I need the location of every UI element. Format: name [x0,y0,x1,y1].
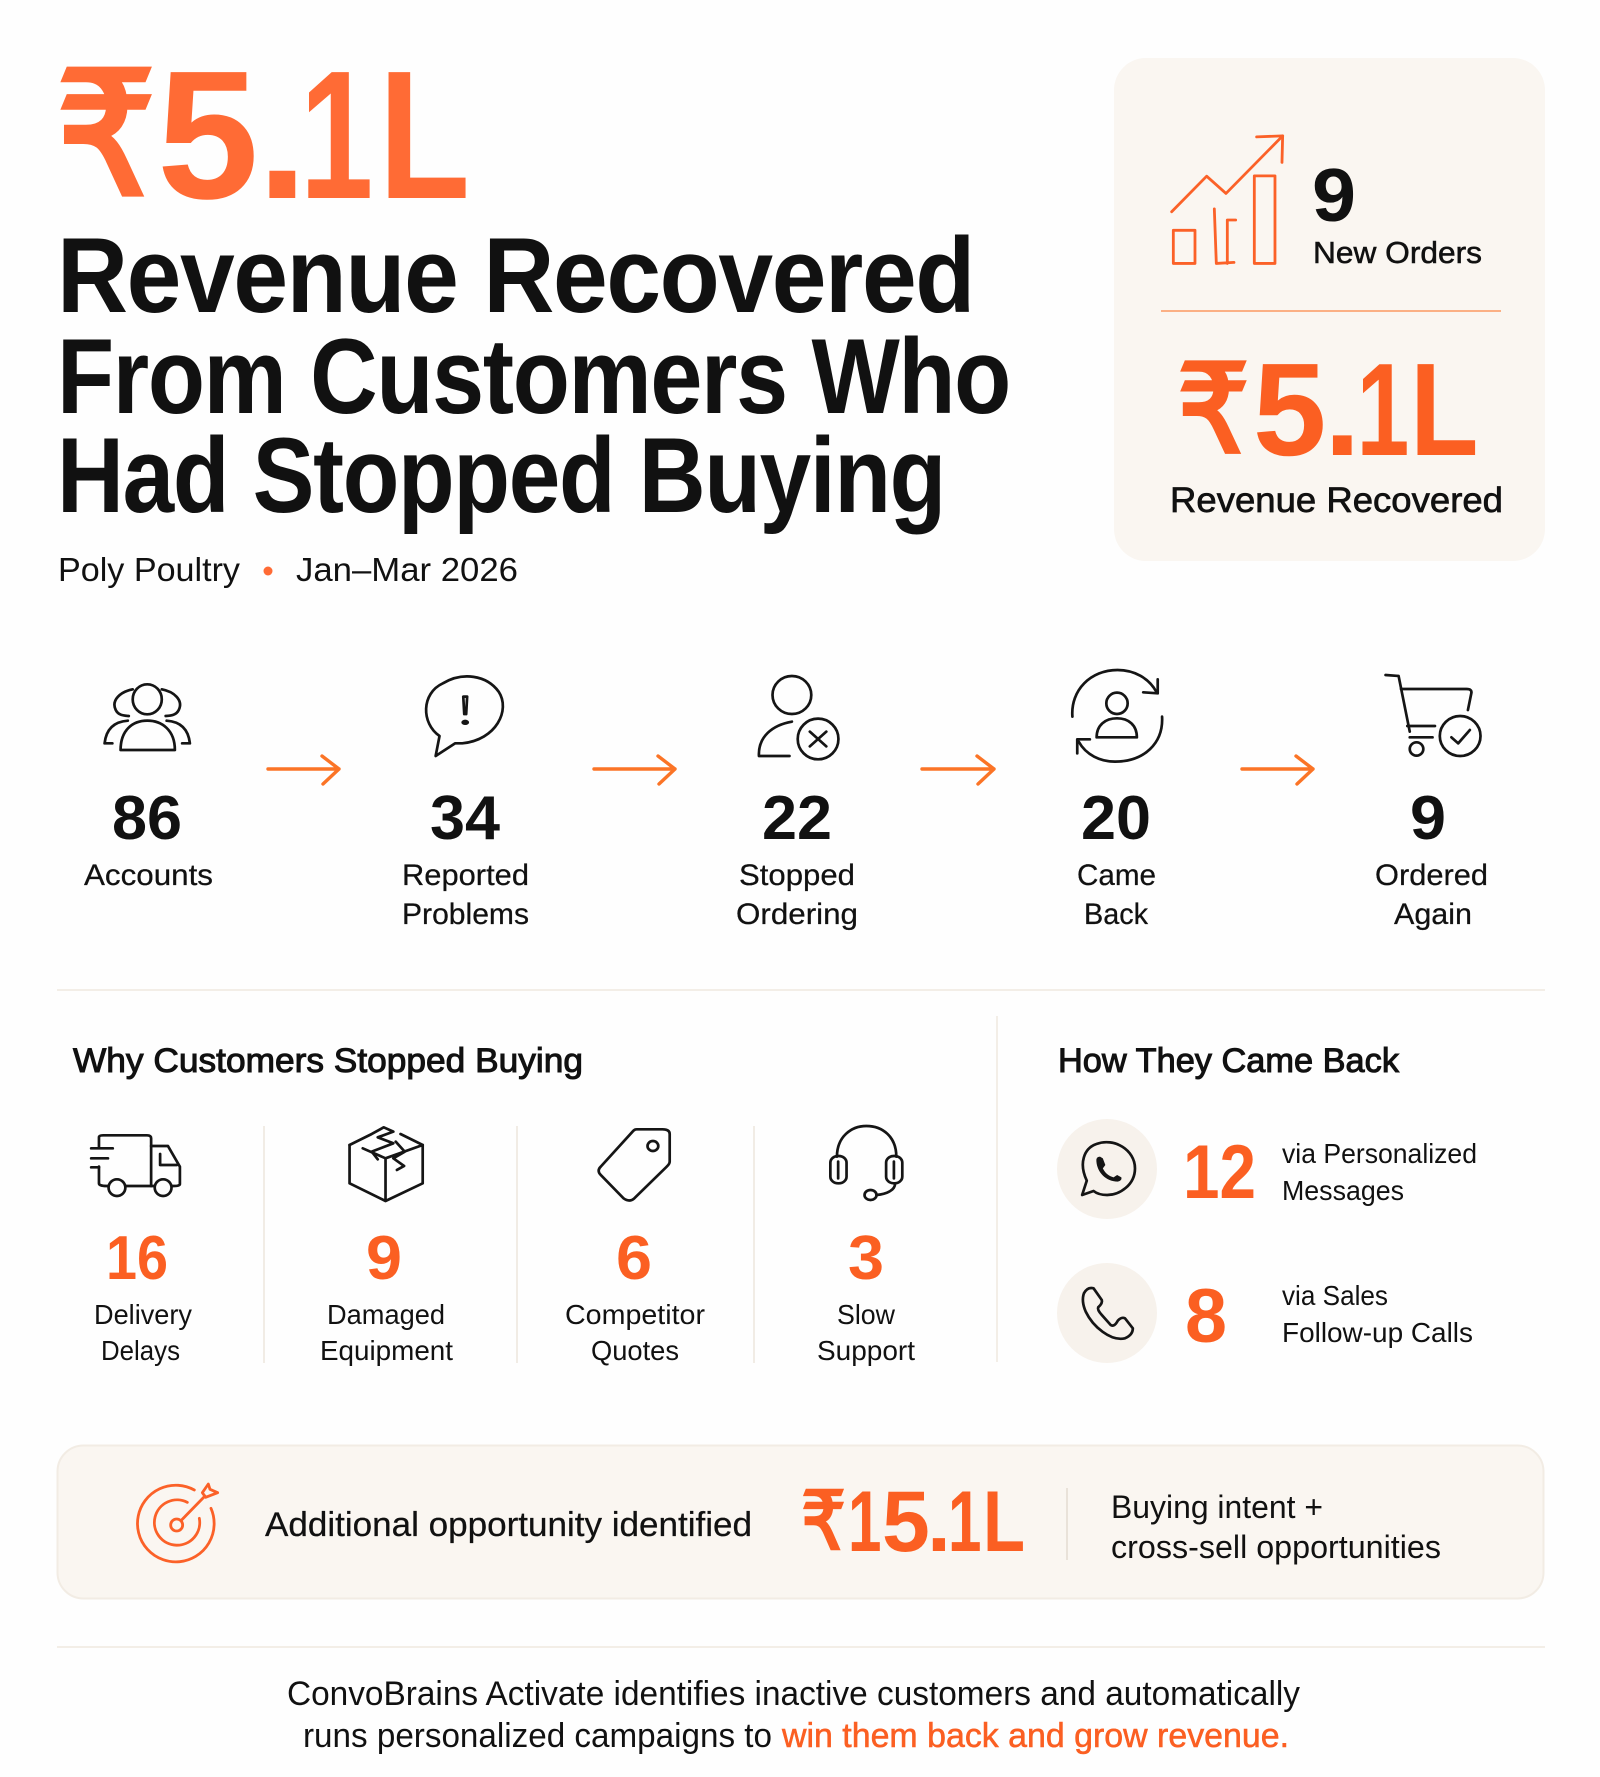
reason: delivery delays: Delivery [94,1299,192,1330]
subtitle [58,551,518,588]
funnel step: came back: Came [1077,859,1156,892]
icon: cart with check [1386,675,1481,756]
footer statement: ConvoBrains Activate identifies inactive customers and automatically [287,1675,1300,1713]
reason: damaged equipment: Damaged [327,1299,445,1330]
icon: price tag [599,1129,670,1200]
reason: damaged equipment: Equipment [320,1335,453,1366]
funnel step: stopped ordering: 22 [762,784,832,853]
channel: sales calls: 8 [1185,1274,1227,1359]
icon: target [137,1484,218,1562]
new orders label: New Orders [1313,235,1482,270]
funnel step: ordered again [1375,675,1488,931]
reason: delivery delays: Delays [101,1335,180,1366]
subtitle: Poly Poultry [58,551,241,588]
icon: headset [830,1126,902,1200]
title: From Customers Who [57,316,1010,436]
icon: phone [1083,1288,1133,1339]
footer statement: win them back and grow revenue. [781,1717,1289,1755]
funnel step: stopped ordering: Ordering [736,898,858,931]
funnel step: reported problems [402,676,529,931]
reason: competitor quotes: 6 [616,1224,652,1293]
reason: competitor quotes: Quotes [591,1335,679,1366]
opportunity value: L [983,1474,1025,1570]
funnel step: reported problems: Reported [402,859,529,892]
funnel step: stopped ordering [736,676,858,931]
reason: damaged equipment: 9 [366,1224,402,1293]
panel: additional opportunity [58,1446,1544,1598]
icon: people [105,684,190,750]
reason: slow support: Support [817,1335,915,1366]
channel: sales calls: Follow-up Calls [1282,1317,1473,1348]
new orders count: 9 [1312,153,1356,237]
icon: person with cross [759,676,838,759]
heading: how they came back: How They Came Back [1058,1042,1400,1080]
hero value: L [378,34,470,237]
channel: sales calls: via Sales [1282,1280,1388,1311]
hero value: ₹ [56,39,156,230]
panel value label: Revenue Recovered [1170,481,1503,520]
opportunity value: 1 [848,1473,881,1570]
arrow [922,756,994,784]
reason: competitor quotes: Competitor [565,1299,705,1330]
icon: truck [91,1135,180,1196]
funnel step: reported problems: Problems [402,898,529,931]
panel: additional opportunity: Additional opportunity identified [265,1506,752,1544]
reason: damaged equipment [320,1127,453,1366]
panel value: ₹ [1177,342,1250,479]
hero value [56,32,470,237]
icon: whatsapp [1082,1142,1135,1195]
icon: growth chart [1172,136,1283,263]
funnel step: reported problems: 34 [430,784,501,853]
panel: additional opportunity: Buying intent + [1111,1489,1323,1525]
reason: competitor quotes [565,1129,705,1366]
reason: delivery delays: 16 [106,1224,168,1293]
funnel step: accounts: 86 [112,784,182,853]
title: Had Stopped Buying [57,415,945,535]
arrow [268,756,339,784]
panel value [1177,335,1479,484]
panel: summary [1114,58,1545,561]
funnel step: came back [1072,670,1162,931]
icon: speech bubble alert [426,676,503,756]
reason: slow support [817,1126,915,1366]
arrow [594,756,675,784]
funnel step: came back: 20 [1081,784,1151,853]
reason: slow support: 3 [848,1224,884,1293]
arrow [1242,756,1313,784]
subtitle: Jan–Mar 2026 [296,551,518,588]
opportunity value: 5. [882,1474,951,1570]
footer statement: runs personalized campaigns to [303,1717,772,1755]
funnel step: accounts: Accounts [84,859,213,892]
panel value: L [1410,335,1479,483]
opportunity value [801,1473,1025,1570]
title [57,215,1010,535]
hero value: 5. [157,32,308,237]
heading: why customers stopped: Why Customers Stopped Buying [73,1042,583,1080]
panel value: 1 [1356,337,1409,484]
icon: person with return arrows [1072,670,1162,762]
channel: personalized messages: Messages [1282,1175,1404,1206]
funnel step: ordered again: Again [1394,898,1472,931]
funnel step: ordered again: Ordered [1375,859,1488,892]
channel: personalized messages: 12 [1183,1130,1256,1215]
footer statement [287,1675,1300,1755]
opportunity value: 1 [948,1473,981,1570]
reason: delivery delays [91,1135,192,1366]
hero value: 1 [300,33,373,237]
reason: slow support: Slow [837,1299,896,1330]
channel: sales calls [1057,1263,1473,1363]
funnel step: stopped ordering: Stopped [739,859,855,892]
funnel step: ordered again: 9 [1410,784,1446,853]
funnel step: came back: Back [1084,898,1149,931]
panel: additional opportunity: cross-sell opportunities [1111,1529,1441,1565]
funnel step: accounts [84,684,213,892]
channel: personalized messages [1057,1119,1477,1219]
icon: damaged box [350,1127,423,1201]
panel value: 5. [1253,336,1361,483]
opportunity value: ₹ [801,1477,846,1567]
channel: personalized messages: via Personalized [1282,1138,1477,1169]
title: Revenue Recovered [57,215,974,335]
